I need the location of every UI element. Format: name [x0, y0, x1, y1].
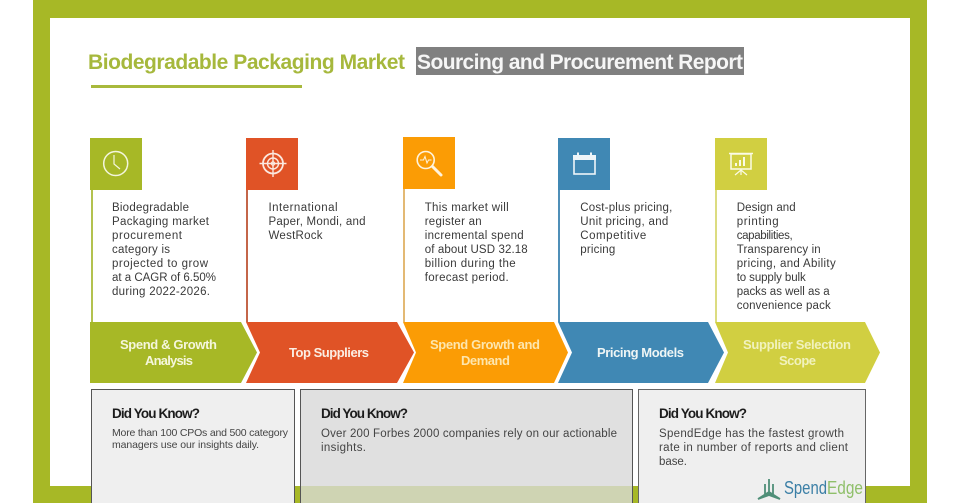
icon: calendar	[558, 138, 610, 190]
text: spend growth description: register an	[425, 216, 482, 228]
panel: did you know 3: SpendEdge has the fastest growth	[659, 428, 844, 440]
text: supplier selection description: convenience pack	[737, 300, 831, 312]
panel: top suppliers	[246, 138, 414, 383]
text: pricing models description: pricing	[580, 244, 615, 256]
text: supplier selection description: Design and	[737, 202, 796, 214]
icon: presentation board	[715, 138, 767, 190]
text: pricing models description: Unit pricing, and	[580, 216, 668, 228]
arrow: spend and growth analysis: Analysis	[145, 353, 193, 368]
text: pricing models description	[580, 202, 672, 256]
text: pricing models description: Cost-plus pricing,	[580, 202, 672, 214]
arrow: supplier selection scope: Supplier Selection	[743, 337, 851, 352]
panel: did you know 2: Over 200 Forbes 2000 companies rely on our actionable	[321, 428, 617, 440]
text: spend growth description	[425, 202, 528, 284]
text: spend and growth description: Packaging market	[112, 216, 210, 228]
panel: did you know 2: insights.	[321, 442, 366, 454]
icon: clock	[90, 138, 142, 190]
arrow: spend growth and demand	[403, 322, 568, 383]
arrow: supplier selection scope	[715, 322, 880, 383]
text: supplier selection description: packs as well as a	[737, 286, 830, 298]
icon: magnifier with pulse	[403, 137, 455, 189]
text: spend and growth description: category is	[112, 244, 170, 256]
panel: did you know 3: base.	[659, 456, 687, 468]
arrow: supplier selection scope: Scope	[779, 353, 816, 368]
text: pricing models description: Competitive	[580, 230, 646, 242]
text: spend and growth description: projected to grow	[112, 258, 209, 270]
panel: did you know 1: More than 100 CPOs and 500 category	[112, 427, 289, 439]
panel: spend growth and demand	[403, 137, 568, 383]
panel: spend and growth analysis	[90, 138, 257, 383]
arrow: top suppliers: Top Suppliers	[289, 345, 369, 360]
panel: did you know 3: rate in number of reports and client	[659, 442, 849, 454]
arrow: spend and growth analysis: Spend & Growth	[120, 337, 217, 352]
text: supplier selection description	[737, 202, 836, 312]
title: Sourcing and Procurement Report	[417, 51, 743, 74]
text: top suppliers description: International	[268, 202, 338, 214]
text: supplier selection description: printing	[737, 216, 779, 228]
text: spend growth description: forecast period.	[425, 272, 509, 284]
text: top suppliers description: Paper, Mondi, and	[268, 216, 366, 228]
panel: did you know 1: Did You Know?	[112, 406, 200, 421]
panel: did you know 3: Did You Know?	[659, 406, 747, 421]
text: top suppliers description: WestRock	[268, 230, 323, 242]
text: top suppliers description	[268, 202, 366, 242]
panel: pricing models	[558, 138, 724, 383]
text: spend growth description: incremental spend	[425, 230, 524, 242]
text: spend and growth description: Biodegradable	[112, 202, 189, 214]
text: spend growth description: of about USD 32.18	[425, 244, 528, 256]
text: supplier selection description: capabilities,	[737, 230, 793, 242]
panel: did you know 1: managers use our insights daily.	[112, 439, 259, 451]
panel: did you know 2: Did You Know?	[321, 406, 408, 421]
logo: SpendEdge: Edge	[827, 478, 863, 498]
icon: target	[246, 138, 298, 190]
logo: SpendEdge	[758, 478, 863, 499]
panel: did you know 3	[638, 390, 866, 503]
panel: supplier selection scope	[715, 138, 880, 383]
text: spend and growth description: procurement	[112, 230, 183, 242]
arrow: spend growth and demand: Demand	[461, 353, 510, 368]
arrow: pricing models	[558, 322, 724, 383]
text: spend growth description: This market will	[425, 202, 509, 214]
panel: did you know 1	[92, 390, 294, 503]
text: spend and growth description: at a CAGR of 6.50%	[112, 272, 216, 284]
logo: SpendEdge: Spend	[784, 478, 827, 498]
title: Biodegradable Packaging Market	[88, 51, 405, 74]
arrow: top suppliers	[246, 322, 414, 383]
text: supplier selection description: pricing, and Ability	[737, 258, 836, 270]
text: supplier selection description: to supply bulk	[737, 272, 806, 284]
arrow: spend and growth analysis	[90, 322, 257, 383]
text: spend and growth description: during 2022-2026.	[112, 286, 210, 298]
text: spend growth description: billion during the	[425, 258, 516, 270]
arrow: pricing models: Pricing Models	[597, 345, 684, 360]
arrow: spend growth and demand: Spend Growth and	[430, 337, 540, 352]
text: supplier selection description: Transparency in	[737, 244, 821, 256]
title	[88, 47, 744, 75]
text: spend and growth description	[112, 202, 216, 298]
panel: did you know 2	[300, 390, 632, 503]
